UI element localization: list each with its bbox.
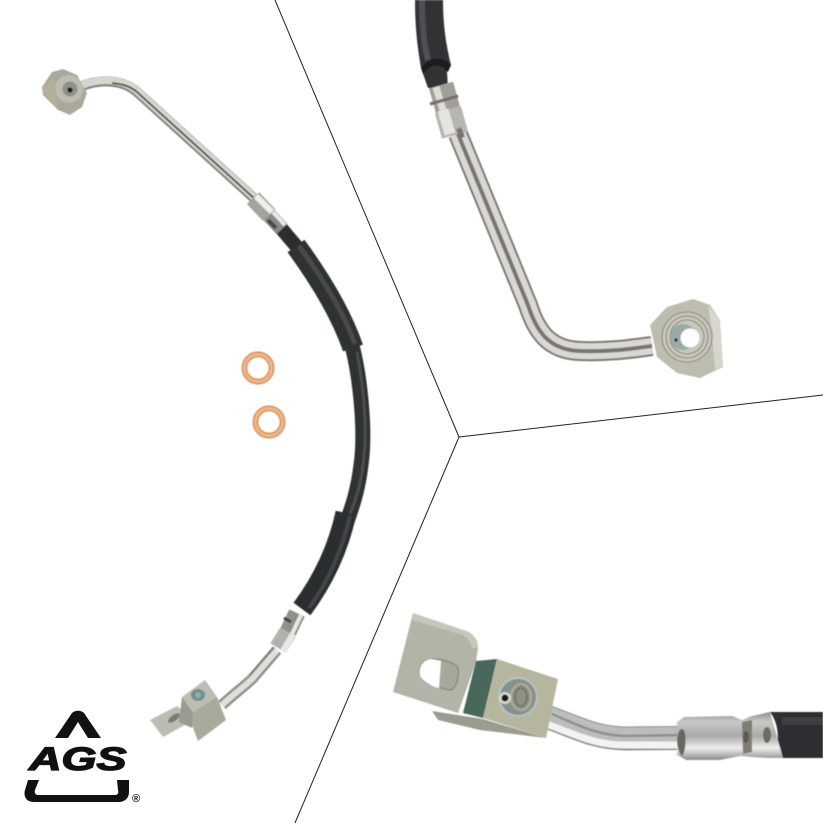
hose end bbox=[415, 0, 451, 88]
panel: banjo end detail bbox=[415, 0, 723, 378]
panel: full brake hose assembly bbox=[42, 69, 365, 741]
upper hose sleeve bbox=[296, 246, 355, 348]
bracket block fitting bbox=[150, 680, 226, 741]
lower crimp ferrule bbox=[278, 613, 301, 651]
block fitting bbox=[432, 659, 558, 738]
upper crimp ferrule bbox=[253, 196, 285, 229]
lower metal tube bbox=[222, 648, 277, 705]
mounting bracket bbox=[393, 613, 478, 713]
banjo fitting bbox=[650, 299, 723, 378]
logo wordmark: AGS bbox=[28, 741, 127, 777]
icon: copper washer lower bbox=[255, 408, 283, 436]
crimp ferrule bbox=[677, 712, 783, 760]
upper banjo fitting bbox=[42, 69, 87, 115]
steel tube bbox=[458, 134, 652, 351]
logo registered mark: ® bbox=[132, 793, 140, 805]
panel: bracket end detail bbox=[393, 613, 823, 760]
icon: copper washer upper bbox=[244, 354, 272, 382]
lower hose sleeve bbox=[302, 513, 350, 609]
logo caret bbox=[55, 711, 101, 738]
logo base bbox=[24, 780, 129, 802]
upper metal tube bbox=[80, 80, 256, 200]
rubber hose bbox=[280, 227, 365, 530]
logo: AGS bbox=[24, 711, 140, 805]
hose end bbox=[770, 712, 823, 758]
steel tube bbox=[544, 714, 682, 745]
crimp ferrule bbox=[430, 85, 463, 135]
